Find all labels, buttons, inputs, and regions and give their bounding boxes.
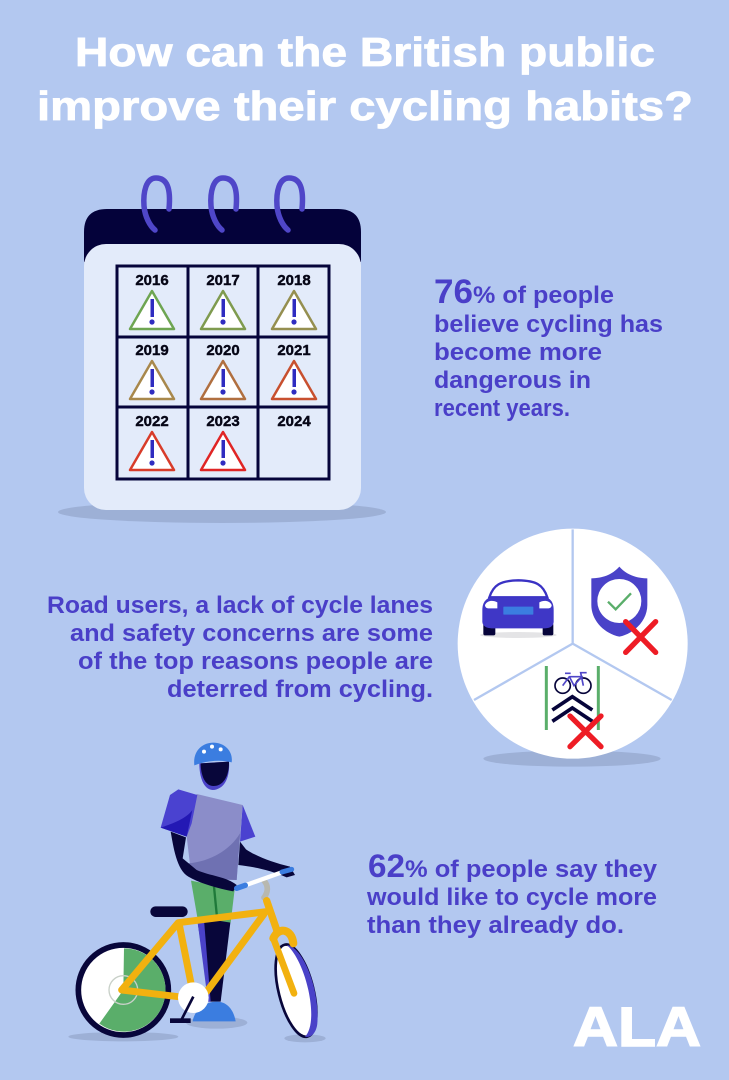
text: 62% statistic: than they already do. [367,912,624,939]
text: 76% statistic [434,273,663,422]
figure: shoe [193,1002,236,1021]
figure: legs [197,920,231,1002]
icon: shield with check crossed out [591,567,656,652]
calendar grid [117,266,329,479]
illustration: cyclist with bicycle [68,743,326,1042]
text: 62% statistic: would like to cycle more [366,884,657,911]
text: 76% statistic: % of people [473,282,614,309]
text: 76% statistic: 76 [434,273,473,311]
calendar rings [144,178,302,230]
text: 62% statistic: % of people say they [405,856,658,883]
bike: crank and pedal [170,982,209,1023]
figure: torso [187,794,243,880]
figure: shorts [191,881,235,923]
icon: three-part deterrents circle [458,529,688,767]
text: 76% statistic: dangerous in [434,367,591,394]
title [37,29,693,129]
bike: front wheel [268,941,324,1041]
calendar years: 2020 [206,342,240,359]
calendar years: 2021 [277,342,311,359]
figure: left arm [171,832,237,891]
icon: car [480,580,557,638]
calendar years: 2016 [135,272,169,289]
text: 76% statistic: believe cycling has [434,311,663,338]
calendar years: 2023 [206,413,240,430]
bike: saddle [150,906,188,917]
calendar years: 2018 [277,272,311,289]
figure: left sleeve [161,789,197,837]
calendar years [135,272,311,430]
text: 62% statistic [366,848,658,939]
text: reasons people are deterred: and safety concerns are some [70,620,433,647]
figure: right sleeve and arm [240,805,255,842]
ground shadows [68,1017,326,1042]
warning triangles [130,291,316,470]
bike: handlebar [237,869,292,898]
icon: cycle lane crossed out [546,666,601,747]
calendar body [84,244,361,510]
text: 76% statistic: recent years. [434,395,570,422]
calendar years: 2022 [135,413,169,430]
text: reasons people are deterred: Road users, a lack of cycle lanes [47,592,433,619]
text: 76% statistic: become more [434,339,602,366]
text: reasons people are deterred: deterred from cycling. [167,676,433,703]
figure: head and helmet [199,762,229,790]
exclamation marks [149,299,297,466]
text: reasons people are deterred: of the top reasons people are [78,648,433,675]
text: 62% statistic: 62 [368,848,405,884]
calendar years: 2017 [206,272,240,289]
title: improve their cycling habits? [37,83,693,129]
logo: ALA: ALA [573,995,701,1058]
icon: calendar [58,178,386,523]
calendar years: 2019 [135,342,169,359]
bike: frame [122,901,294,997]
bike: rear wheel [78,945,168,1035]
text: reasons people are deterred [47,592,433,703]
title: How can the British public [75,29,655,75]
calendar header [84,209,361,262]
calendar years: 2024 [277,413,311,430]
